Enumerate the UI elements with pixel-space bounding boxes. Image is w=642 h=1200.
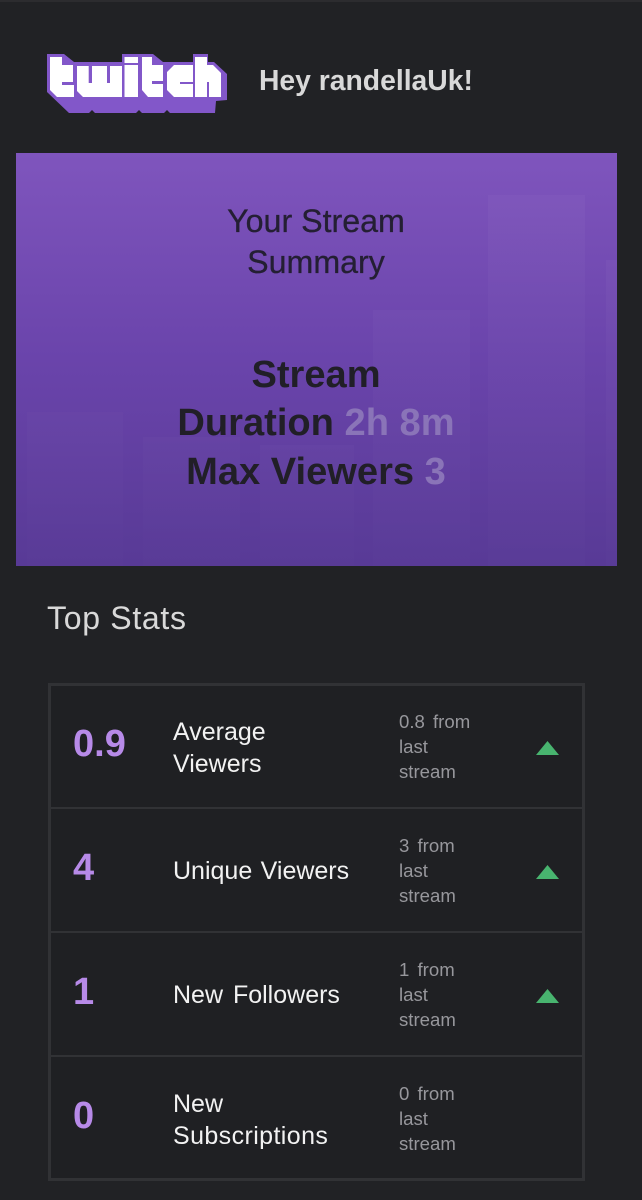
row: new subscriptions: 0 from: [399, 1083, 455, 1104]
stat: stream duration: Stream: [251, 354, 381, 396]
row: new followers: 1: [73, 971, 94, 1013]
row: unique viewers: 4: [73, 847, 94, 889]
icon: green up arrow: [536, 989, 559, 1003]
icon: green up arrow: [536, 865, 559, 879]
row: new subscriptions: last: [399, 1108, 429, 1129]
icon: twitch logo: [47, 54, 227, 113]
row: average viewers: Viewers: [173, 750, 261, 778]
greeting: Hey randellaUk!: [259, 64, 473, 96]
chart: ghost bars: [27, 195, 617, 566]
heading: top stats: Top Stats: [47, 600, 187, 636]
row: unique viewers: stream: [399, 885, 456, 906]
row: unique viewers: 3 from: [399, 835, 455, 856]
row: new followers: New Followers: [173, 981, 340, 1009]
panel: stream summary: Summary: [247, 244, 386, 280]
row: new followers: last: [399, 984, 429, 1005]
row: average viewers: 0.9: [73, 723, 126, 765]
stat: stream duration: [177, 354, 455, 444]
row: new subscriptions: 0: [73, 1095, 94, 1137]
stat: stream duration: Duration 2h 8m: [177, 402, 455, 444]
row: new subscriptions: New: [173, 1090, 224, 1118]
table: stats: [50, 684, 584, 1180]
stat: max viewers: Max Viewers 3: [186, 451, 446, 493]
row: average viewers: last: [399, 736, 429, 757]
row: new subscriptions: Subscriptions: [173, 1122, 328, 1150]
row: new followers: [73, 959, 559, 1030]
row: average viewers: 0.8 from: [399, 711, 470, 732]
heading: your stream summary: Your Stream: [227, 203, 405, 239]
row: new followers: 1 from: [399, 959, 455, 980]
row: average viewers: [73, 711, 559, 782]
row: new subscriptions: stream: [399, 1133, 456, 1154]
row: unique viewers: Unique Viewers: [173, 857, 349, 885]
row: unique viewers: [73, 835, 559, 906]
row: average viewers: Average: [173, 718, 266, 746]
row: new subscriptions: [73, 1083, 456, 1154]
icon: green up arrow: [536, 741, 559, 755]
row: unique viewers: last: [399, 860, 429, 881]
panel: stream summary: [16, 153, 617, 566]
row: average viewers: stream: [399, 761, 456, 782]
row: new followers: stream: [399, 1009, 456, 1030]
